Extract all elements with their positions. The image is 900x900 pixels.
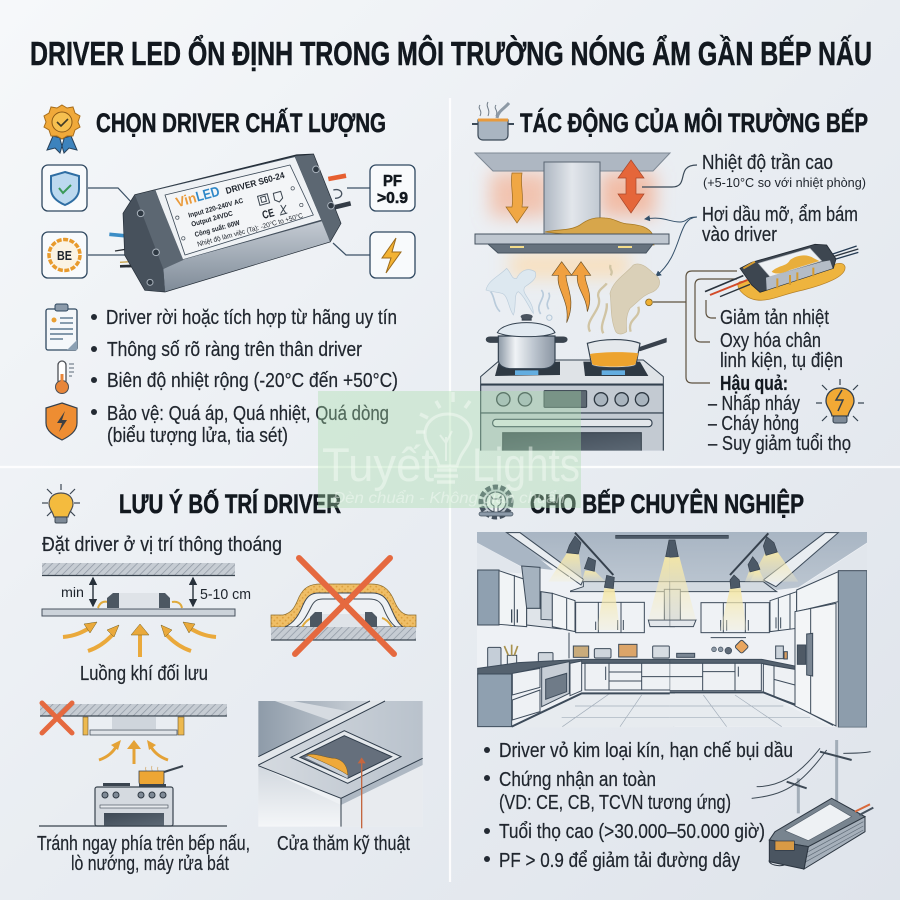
steam: white	[486, 268, 552, 320]
diagram: ventilated mounting: min	[61, 584, 84, 600]
heading: chọn driver chất lượng: CHỌN DRIVER CHẤT LƯỢNG	[96, 107, 386, 138]
icon: clipboard	[46, 304, 77, 350]
feature list: Chứng nhận an toàn	[499, 769, 656, 791]
heading: cho bếp chuyên nghiệp: CHO BẾP CHUYÊN NGHIỆP	[530, 488, 804, 519]
range hood	[475, 153, 670, 253]
diagram: inspection hatch	[258, 701, 423, 828]
watermark wordmark	[322, 438, 580, 507]
icon: gear and wrench	[479, 487, 513, 517]
consequence text: linh kiện, tụ điện	[720, 350, 843, 372]
grease label with leaders: vào driver	[702, 224, 777, 246]
heat zones	[490, 172, 655, 278]
watermark wordmark: Tuyết	[322, 438, 434, 491]
leader lines	[88, 188, 370, 255]
grease label with leaders	[645, 204, 858, 276]
arrows: rising heat	[552, 262, 591, 323]
base units	[670, 659, 795, 670]
label text on driver: LED	[194, 183, 221, 205]
feature list: Driver rời hoặc tích hợp từ hãng uy tín	[106, 307, 397, 329]
beams	[548, 553, 675, 630]
left wall cabinets	[478, 570, 499, 625]
consequence text: – Cháy hỏng	[708, 413, 799, 435]
label text on driver: Input 220-240V AC	[188, 198, 244, 220]
pan on stove	[587, 338, 672, 368]
steam: greasy smoke	[589, 264, 660, 334]
icon: orange protection shield	[46, 403, 77, 440]
subheading: Đặt driver ở vị trí thông thoáng	[42, 534, 282, 556]
label text on driver: Output 24VDC	[191, 210, 234, 229]
red cross small	[42, 703, 72, 733]
feature list: PF > 0.9 để giảm tải đường dây	[499, 850, 740, 872]
icon: award ribbon	[44, 105, 80, 153]
heat label with leader: (+5-10°C so với nhiệt phòng)	[703, 175, 866, 190]
feature list: (biểu tượng lửa, tia sét)	[107, 425, 288, 447]
label text on driver: Công suất: 60W	[194, 219, 241, 239]
feature list: Bảo vệ: Quá áp, Quá nhiệt, Quá dòng	[107, 403, 389, 425]
feature list: Tuổi thọ cao (>30.000–50.000 giờ)	[499, 821, 765, 843]
consequence text: – Nhấp nháy	[708, 393, 800, 415]
label text on driver: DRIVER S60-24	[225, 170, 286, 196]
track lights	[670, 533, 777, 589]
icon box: shield	[42, 165, 87, 211]
panel: kitchen environment effects	[472, 102, 868, 455]
diagram: ventilated mounting: 5-10 cm	[200, 586, 251, 603]
diagram: avoid above stove	[39, 704, 227, 826]
heading: lưu ý bố trí driver: LƯU Ý BỐ TRÍ DRIVER	[119, 487, 341, 519]
label text on driver: Nhiệt độ làm việc (Ta): -20°C to +50°C	[196, 212, 304, 249]
icon box: lightning	[370, 232, 415, 278]
caption: avoid: lò nướng, máy rửa bát	[71, 853, 229, 875]
consequence text: Giảm tản nhiệt	[720, 307, 829, 329]
watermark wordmark: Lights	[472, 438, 580, 491]
leader dot	[646, 299, 652, 306]
watermark	[318, 391, 581, 508]
heat label with leader: Nhiệt độ trần cao	[702, 152, 833, 174]
label text on driver	[174, 170, 304, 249]
stove, cookware, steam	[481, 262, 672, 453]
icon: light bulb	[42, 484, 80, 523]
side hood	[522, 566, 540, 608]
panel: professional kitchen	[477, 487, 873, 872]
refrigerator	[795, 603, 836, 726]
label text on driver: CE	[261, 207, 276, 222]
arrow: heat up and down	[618, 160, 644, 213]
icon: power line and driver	[752, 740, 873, 869]
icon box: BE badge	[42, 232, 87, 278]
driver product illustration	[109, 154, 351, 292]
feature list: Biên độ nhiệt rộng (-20°C đến +50°C)	[107, 370, 398, 392]
feature list: Thông số rõ ràng trên thân driver	[107, 339, 362, 361]
arrow: heat downward	[506, 173, 528, 223]
consequence text: Hậu quả:	[720, 373, 788, 395]
icon box: PF>0.9: >0.9	[377, 190, 408, 207]
counter objects	[488, 644, 669, 668]
floor	[508, 693, 675, 730]
caption: avoid: Tránh ngay phía trên bếp nấu,	[37, 833, 250, 855]
feature list	[91, 307, 398, 447]
diagram: ventilated mounting	[42, 563, 251, 616]
label text on driver: Vin	[174, 189, 198, 210]
grease label with leaders: Hơi dầu mỡ, ẩm bám	[702, 204, 858, 226]
consequence text	[708, 307, 851, 455]
consequence connector lines	[653, 271, 737, 383]
watermark wordmark: Đèn chuẩn - Không gian chuẩn	[333, 489, 565, 507]
icon box: BE badge: BE	[57, 248, 72, 263]
consequence text: – Suy giảm tuổi thọ	[708, 433, 851, 455]
greasy driver	[705, 244, 858, 300]
utensils and objects	[677, 638, 787, 659]
red cross	[295, 558, 394, 654]
feature list: Driver vỏ kim loại kín, hạn chế bụi dầu	[499, 740, 793, 762]
upper cabinets	[701, 603, 769, 633]
feature list	[484, 740, 793, 872]
beams	[670, 552, 798, 630]
heat label with leader	[642, 152, 866, 190]
caption: airflow: Luồng khí đối lưu	[80, 663, 208, 685]
counters and base units	[478, 659, 675, 674]
icon box: PF>0.9: PF	[383, 173, 402, 190]
icon: steaming pot	[472, 102, 514, 140]
track lights	[567, 533, 675, 589]
airflow arrows	[63, 627, 216, 657]
upper cabinets	[541, 592, 552, 620]
caption: inspection hatch: Cửa thăm kỹ thuật	[277, 833, 410, 855]
pot on stove	[487, 314, 567, 369]
kitchen: left half	[477, 532, 675, 730]
panel: driver placement notes	[37, 484, 423, 875]
kitchen: right half	[670, 532, 867, 727]
diagram: covered driver crossed out	[271, 584, 416, 640]
airflow arrowheads	[84, 622, 195, 637]
icon: thermometer	[56, 361, 74, 394]
caption: avoid	[37, 833, 250, 875]
icon box: PF>0.9	[370, 165, 415, 211]
consequence text: Oxy hóa chân	[720, 330, 821, 352]
feature list: (VD: CE, CB, TCVN tương ứng)	[499, 792, 731, 814]
icon: broken bulb	[816, 379, 864, 423]
stove	[481, 360, 663, 453]
panel: choose quality driver	[42, 105, 415, 447]
kitchen illustration	[477, 532, 867, 730]
